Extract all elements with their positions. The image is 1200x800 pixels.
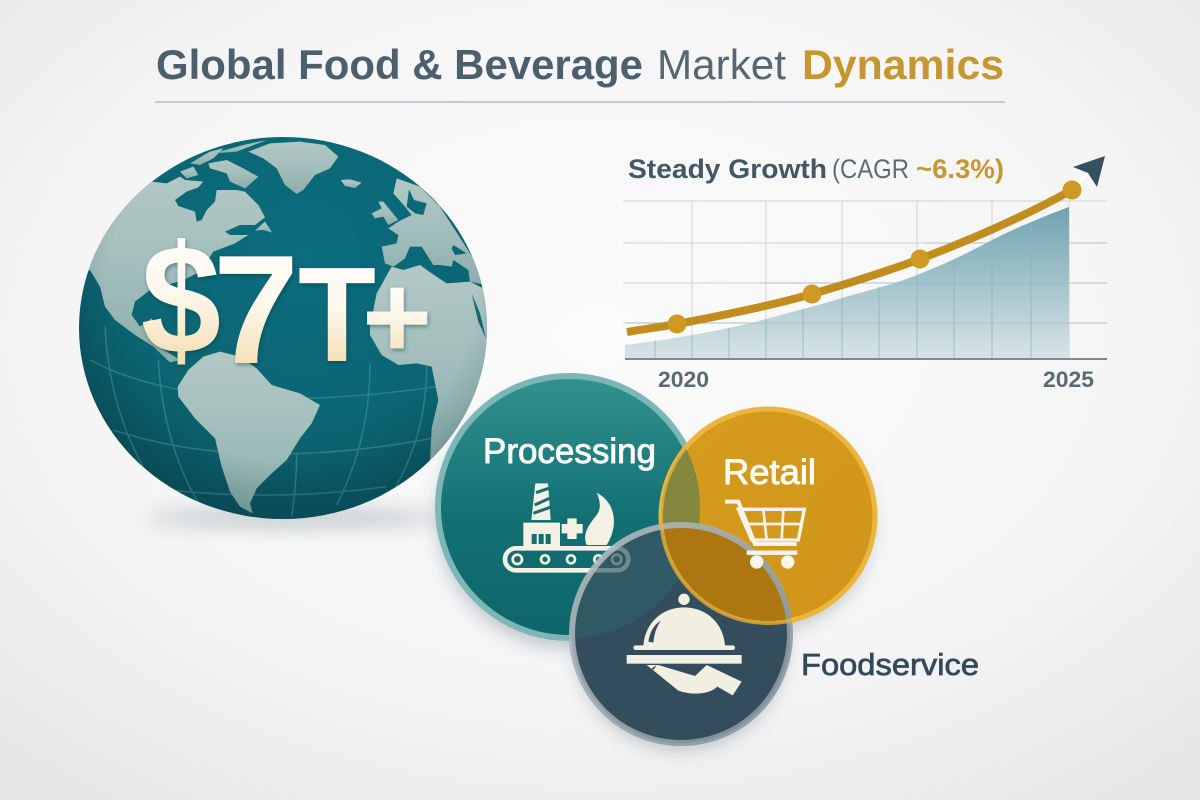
year labels: 2025 xyxy=(1043,367,1094,392)
foodservice label: Foodservice xyxy=(801,647,979,682)
globe grid lines xyxy=(90,327,437,517)
year labels xyxy=(658,367,1094,392)
british isles xyxy=(372,202,398,225)
$7T+ figure xyxy=(141,213,432,396)
chart heading xyxy=(628,154,1004,184)
north america xyxy=(77,177,265,362)
europe xyxy=(382,178,482,284)
segment: retail xyxy=(661,409,875,623)
chart heading: ~6.3%) xyxy=(916,154,1004,184)
arctic islands xyxy=(208,160,258,188)
arrow xyxy=(1072,156,1105,190)
growth chart xyxy=(623,156,1107,360)
segment: processing xyxy=(438,376,700,638)
title: Dynamics xyxy=(802,41,1004,88)
retail label: Retail xyxy=(723,453,816,492)
growth line xyxy=(627,190,1072,332)
processing label: Processing xyxy=(483,432,656,471)
greenland xyxy=(248,142,338,194)
black sea xyxy=(452,245,467,255)
overlap: retail and foodservice xyxy=(662,525,788,623)
title xyxy=(156,41,1004,88)
south america xyxy=(178,352,320,513)
axis xyxy=(625,358,1107,360)
$7T+ figure: 7 xyxy=(213,223,299,396)
$7T+ figure: $ xyxy=(141,213,221,386)
globe xyxy=(77,137,495,519)
$7T+ figure: T xyxy=(298,239,376,390)
africa xyxy=(370,265,495,460)
baltic sea xyxy=(407,189,427,215)
overlap: processing and retail xyxy=(661,448,700,526)
title: Global Food & Beverage xyxy=(156,41,643,88)
$7T+ figure: + xyxy=(362,250,432,384)
red sea xyxy=(472,293,486,338)
segment: foodservice xyxy=(569,448,793,746)
chart heading: (CAGR xyxy=(832,154,909,184)
year labels: 2020 xyxy=(658,367,709,392)
globe shadow xyxy=(145,509,445,527)
overlap: processing and foodservice xyxy=(575,530,678,638)
icon: shopping cart xyxy=(725,502,804,569)
segment shadows xyxy=(437,388,872,750)
continents xyxy=(77,140,495,513)
iceland xyxy=(341,179,362,188)
newfoundland xyxy=(255,222,272,233)
conveyor seen through glass xyxy=(593,548,628,570)
area under curve xyxy=(625,207,1069,359)
title: Market xyxy=(657,41,786,88)
icon: factory conveyor xyxy=(505,483,628,570)
icon: serving cloche xyxy=(627,594,742,695)
chart heading: Steady Growth xyxy=(628,154,827,184)
data points xyxy=(668,180,1082,334)
